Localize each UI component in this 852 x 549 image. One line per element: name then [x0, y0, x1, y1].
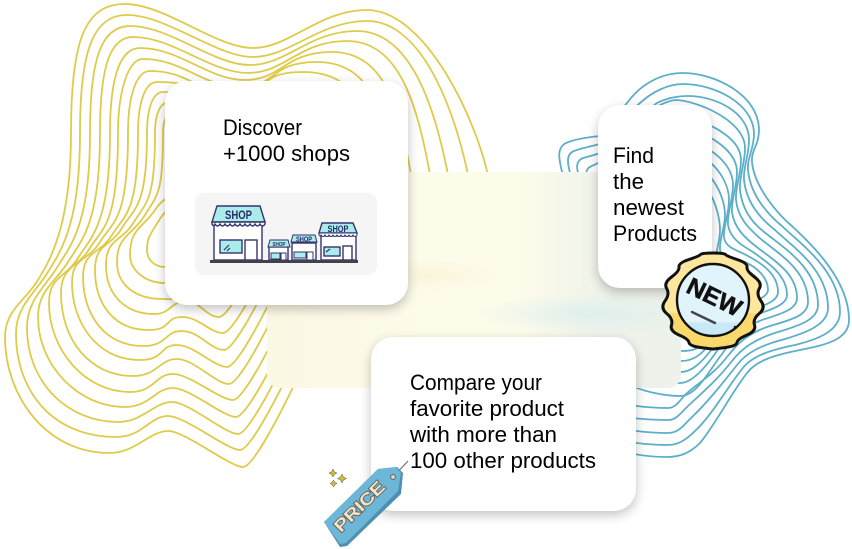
- text: find the newest products: [613, 143, 697, 246]
- icon: new badge: NEW: [682, 273, 746, 323]
- text: find the newest products: newest: [613, 195, 684, 220]
- text: compare products: with more than: [409, 422, 557, 447]
- icon: price tag: [324, 460, 408, 547]
- icon: sparkles: [329, 469, 346, 487]
- icon: price tag: PRICE: [330, 477, 389, 536]
- text: compare products: favorite product: [410, 396, 564, 421]
- text: compare products: 100 other products: [410, 448, 596, 473]
- text: find the newest products: Products: [613, 221, 697, 246]
- soft gradient background panel: [267, 172, 681, 388]
- card: compare products: [371, 337, 636, 511]
- card: newest products: [598, 105, 712, 288]
- icon: new badge: [661, 252, 765, 350]
- card: discover shops: [165, 81, 408, 305]
- heading: discover shops: Discover: [223, 115, 302, 140]
- illustration: row of shops: SHOP: [225, 208, 252, 222]
- text: find the newest products: the: [613, 169, 644, 194]
- illustration: row of shops: SHOP: [296, 236, 312, 244]
- illustration: row of shops: SHOP: [328, 224, 348, 234]
- text: compare products: [409, 370, 596, 473]
- illustration: row of shops: [195, 193, 377, 275]
- heading: discover shops: [223, 115, 350, 166]
- heading: discover shops: +1000 shops: [223, 141, 350, 166]
- text: find the newest products: Find: [613, 143, 654, 168]
- illustration: row of shops: SHOP: [272, 242, 286, 248]
- text: compare products: Compare your: [410, 370, 542, 395]
